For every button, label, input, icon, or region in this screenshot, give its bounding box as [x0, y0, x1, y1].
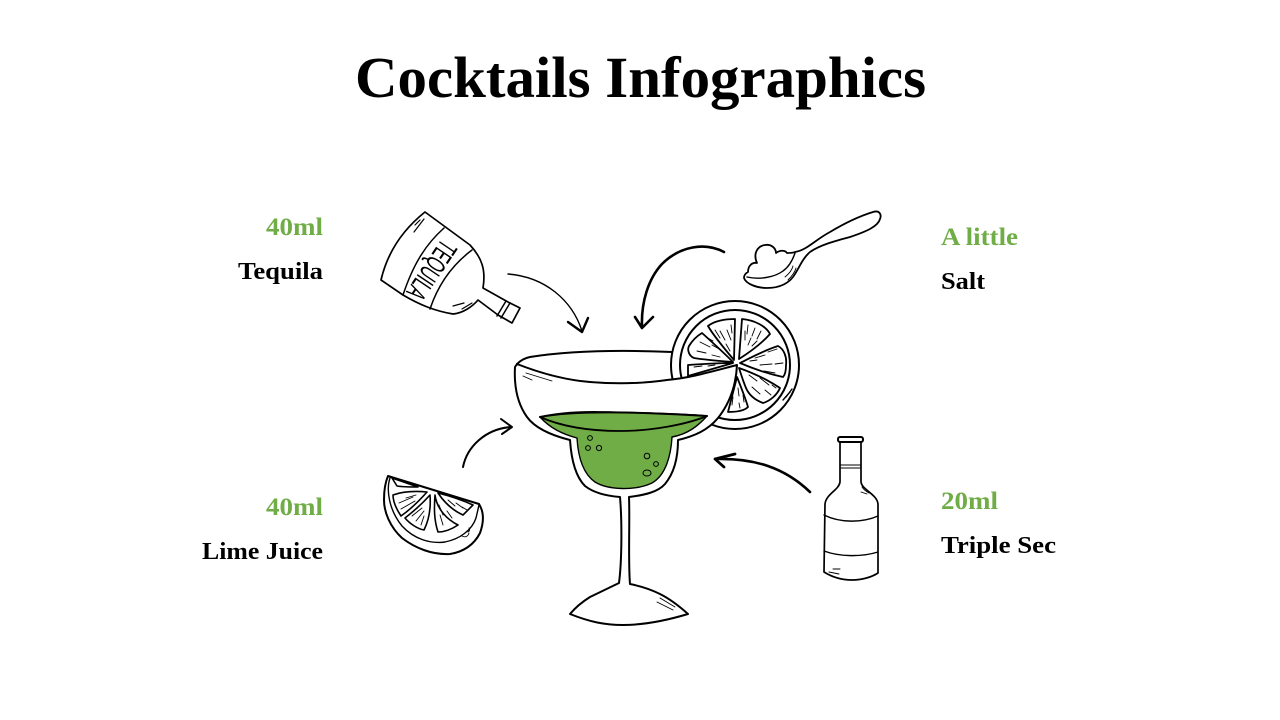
glass: bowl, stem and base: [515, 364, 737, 625]
label: lime juice: Lime Juice: [202, 538, 323, 565]
icon: tequila bottle: [381, 212, 520, 323]
icon: tequila bottle: TEQUILA: [401, 235, 463, 306]
glass: back rim: [517, 351, 672, 382]
liquid: green margarita: [540, 412, 707, 489]
arrow: tequila to glass: [508, 274, 588, 332]
label: tequila: [238, 214, 323, 285]
icon: triple sec bottle: [824, 437, 878, 580]
label: triple sec: 20ml: [941, 488, 998, 515]
label: triple sec: [941, 488, 1056, 559]
icon: lime wedge: [384, 476, 483, 554]
label: salt: A little: [941, 224, 1018, 251]
label: salt: Salt: [941, 268, 986, 295]
label: tequila: 40ml: [266, 214, 323, 241]
arrow: salt to glass: [635, 247, 724, 328]
title: Cocktails Infographics: [355, 45, 926, 110]
arrow: lime juice to glass: [463, 419, 512, 467]
label: salt: [941, 224, 1018, 295]
label: lime juice: 40ml: [266, 494, 323, 521]
arrow: triple sec to glass: [715, 454, 810, 492]
label: triple sec: Triple Sec: [941, 532, 1056, 559]
icon: lime slice: [671, 301, 799, 429]
label: lime juice: [202, 494, 323, 565]
label: tequila: Tequila: [238, 258, 323, 285]
icon: salt spoon: [744, 211, 881, 288]
